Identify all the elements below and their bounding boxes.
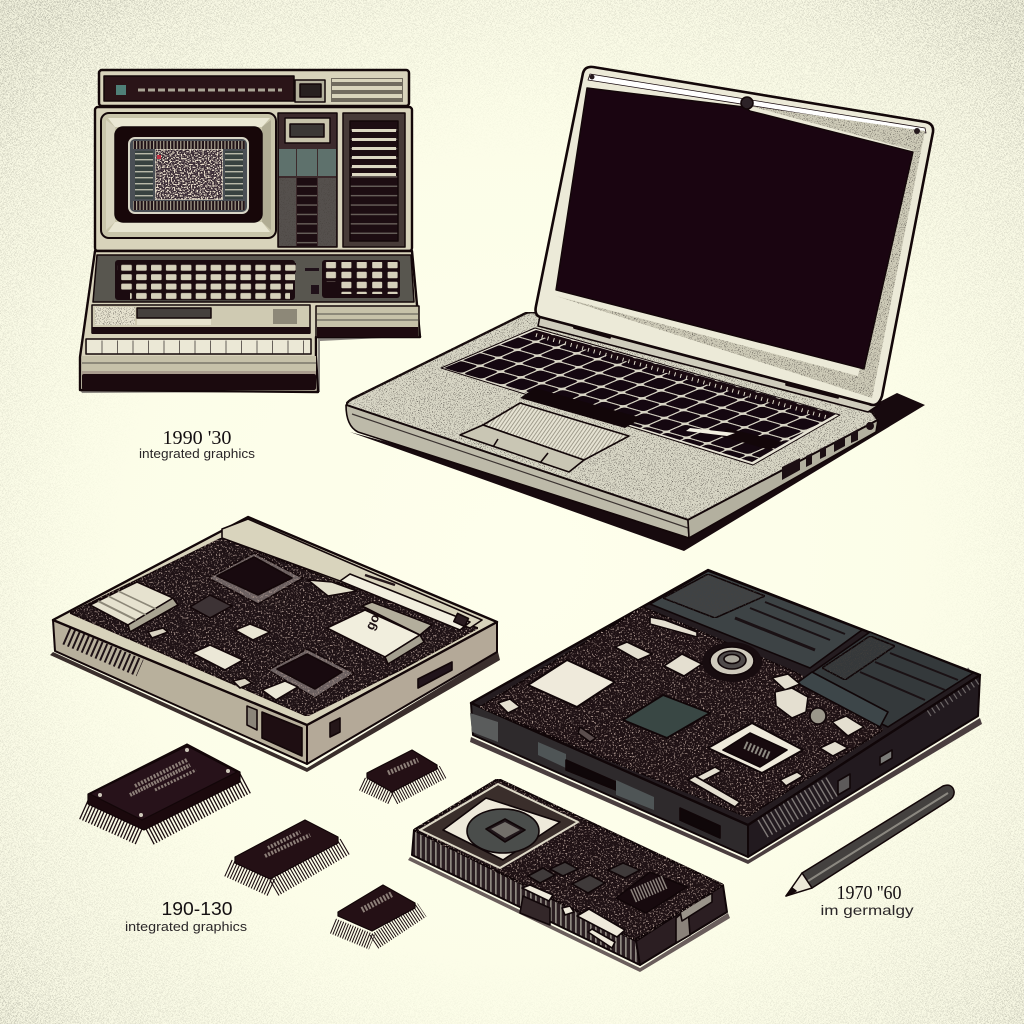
keyboard deck xyxy=(80,251,420,392)
beige motherboard laptop xyxy=(50,517,500,772)
small dies xyxy=(528,862,640,893)
control column xyxy=(278,113,337,247)
caption bottom left subtitle: integrated graphics xyxy=(125,919,248,934)
front key rail xyxy=(82,339,316,390)
retro computer shadow xyxy=(80,336,422,393)
lower chip xyxy=(268,649,354,698)
laptop lid and screen xyxy=(536,67,933,405)
small dark chip xyxy=(190,595,232,618)
rear cover right xyxy=(797,632,973,727)
card top surface xyxy=(414,779,723,940)
caption top left xyxy=(139,427,256,461)
dark board shadow xyxy=(470,718,982,864)
retro main body xyxy=(95,107,412,251)
tape drawer xyxy=(92,305,310,334)
back module xyxy=(222,519,482,628)
laptop base xyxy=(346,312,878,538)
circuit surface xyxy=(70,538,478,716)
beige board rim xyxy=(53,517,497,725)
dark board rim xyxy=(471,570,980,825)
CRT monitor xyxy=(101,113,276,238)
fan xyxy=(702,642,762,682)
side drawer xyxy=(316,306,419,337)
large black die xyxy=(616,872,687,913)
beige board shadow xyxy=(50,652,500,772)
large chip with pins xyxy=(84,744,246,834)
laptop keyboard xyxy=(444,330,836,462)
dark motherboard laptop xyxy=(470,570,982,864)
retro top strip xyxy=(99,70,409,106)
framed processor xyxy=(708,723,803,773)
small chip top with pins xyxy=(362,750,443,798)
beige board side faces xyxy=(53,620,497,764)
small silver parts xyxy=(148,580,357,700)
trackpad xyxy=(460,403,629,472)
caption bottom right: 1970 ''60 xyxy=(836,882,902,904)
modern laptop xyxy=(346,67,933,551)
small components xyxy=(498,617,864,807)
caption top left: 1990 '30 xyxy=(162,427,232,449)
medium chip with pins xyxy=(228,820,346,888)
side ports xyxy=(782,422,874,480)
small chip bottom with pins xyxy=(333,885,422,942)
connectors xyxy=(520,885,625,948)
card shadow xyxy=(408,857,730,972)
dark circuit surface xyxy=(480,607,883,817)
teal chip xyxy=(623,695,710,738)
silver module left xyxy=(90,582,178,632)
caption top left subtitle: integrated graphics xyxy=(139,446,256,461)
card rim xyxy=(420,784,578,868)
light memory module xyxy=(528,660,615,707)
caption bottom left xyxy=(125,899,248,934)
caption bottom left: 190-130 xyxy=(162,899,232,919)
silver module right xyxy=(327,602,432,664)
large chip xyxy=(208,553,303,604)
heat spreader xyxy=(467,809,539,853)
speaker grille xyxy=(343,113,405,247)
caption bottom right xyxy=(820,882,914,918)
CRT screen picture xyxy=(129,138,248,213)
laptop shadow xyxy=(350,393,925,551)
webcam xyxy=(741,97,753,109)
caption bottom right subtitle: im germalgy xyxy=(820,902,914,918)
white bracket xyxy=(443,798,560,860)
card side faces xyxy=(412,830,727,965)
module label: go xyxy=(362,611,382,632)
graphics card device xyxy=(408,779,730,972)
surface mount chips xyxy=(84,744,443,942)
pencil xyxy=(786,785,954,896)
laptop hinges xyxy=(538,316,880,412)
dark board side faces xyxy=(470,675,980,857)
rear cover left xyxy=(650,571,862,668)
retro desktop computer xyxy=(80,70,422,393)
